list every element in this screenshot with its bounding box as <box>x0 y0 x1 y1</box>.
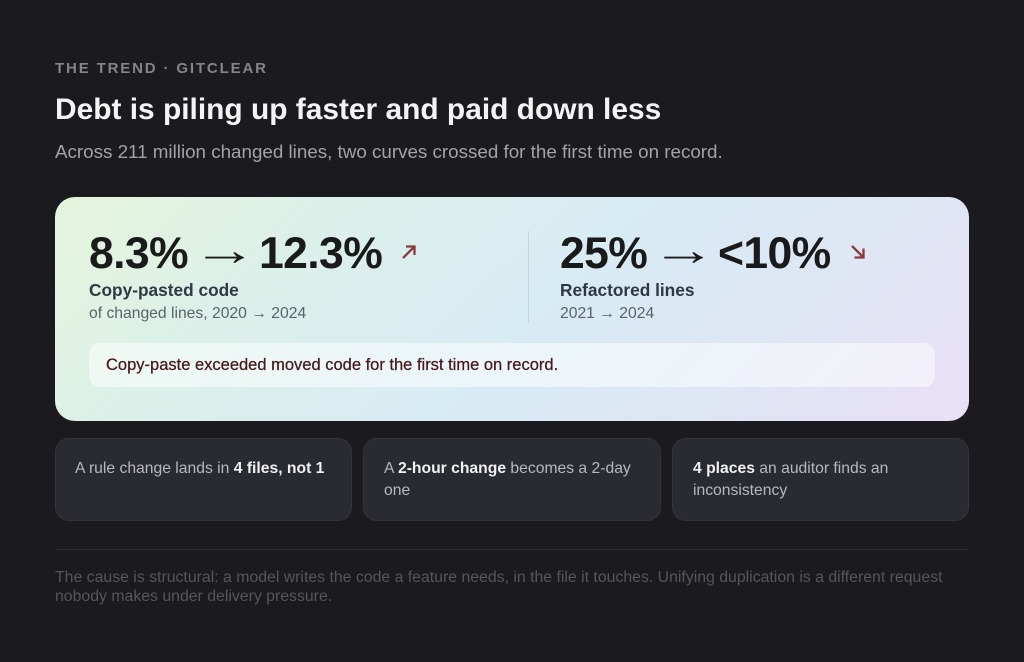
card: 2-hour change: one <box>384 482 410 499</box>
copy-paste end value: 12.3% <box>259 229 382 278</box>
card: rule change <box>55 438 352 521</box>
icon: up arrow <box>402 245 416 259</box>
callout <box>89 343 935 387</box>
arrow: start to end: → <box>651 226 716 275</box>
divider <box>528 231 529 323</box>
refactored start value: 25% <box>560 229 647 278</box>
card: auditor: inconsistency <box>693 482 787 499</box>
refactored end value: <10% <box>718 229 831 278</box>
card: auditor <box>672 438 969 521</box>
icon: down arrow <box>851 245 865 259</box>
card: 2-hour change: A 2-hour change becomes a 2-day <box>384 460 631 477</box>
footer rule <box>55 549 969 550</box>
footer note: The cause is structural: a model writes the code a feature needs, in the file it touches. Unifying duplication is a different request <box>55 569 942 586</box>
card: auditor: 4 places an auditor finds an <box>693 460 888 477</box>
copy-paste label: Copy-pasted code <box>89 280 239 300</box>
eyebrow label: THE TREND · GITCLEAR <box>55 60 268 77</box>
copy-paste start value: 8.3% <box>89 229 188 278</box>
stat: copy-pasted code <box>89 226 416 322</box>
arrow: start to end: → <box>192 226 257 275</box>
card: rule change: A rule change lands in 4 files, not 1 <box>75 460 324 477</box>
footer note <box>55 569 942 605</box>
callout text: Copy-paste exceeded moved code for the first time on record. <box>106 356 558 374</box>
title: Debt is piling up faster and paid down less <box>55 93 661 126</box>
copy-paste detail: of changed lines, 2020 → 2024 <box>89 305 306 322</box>
panel: gradient stats <box>55 197 969 421</box>
stat: refactored lines <box>560 226 865 322</box>
card: 2-hour change <box>363 438 661 521</box>
subtitle: Across 211 million changed lines, two curves crossed for the first time on record. <box>55 141 723 162</box>
refactored label: Refactored lines <box>560 280 694 300</box>
refactored detail: 2021 → 2024 <box>560 305 654 322</box>
footer note: nobody makes under delivery pressure. <box>55 588 332 605</box>
